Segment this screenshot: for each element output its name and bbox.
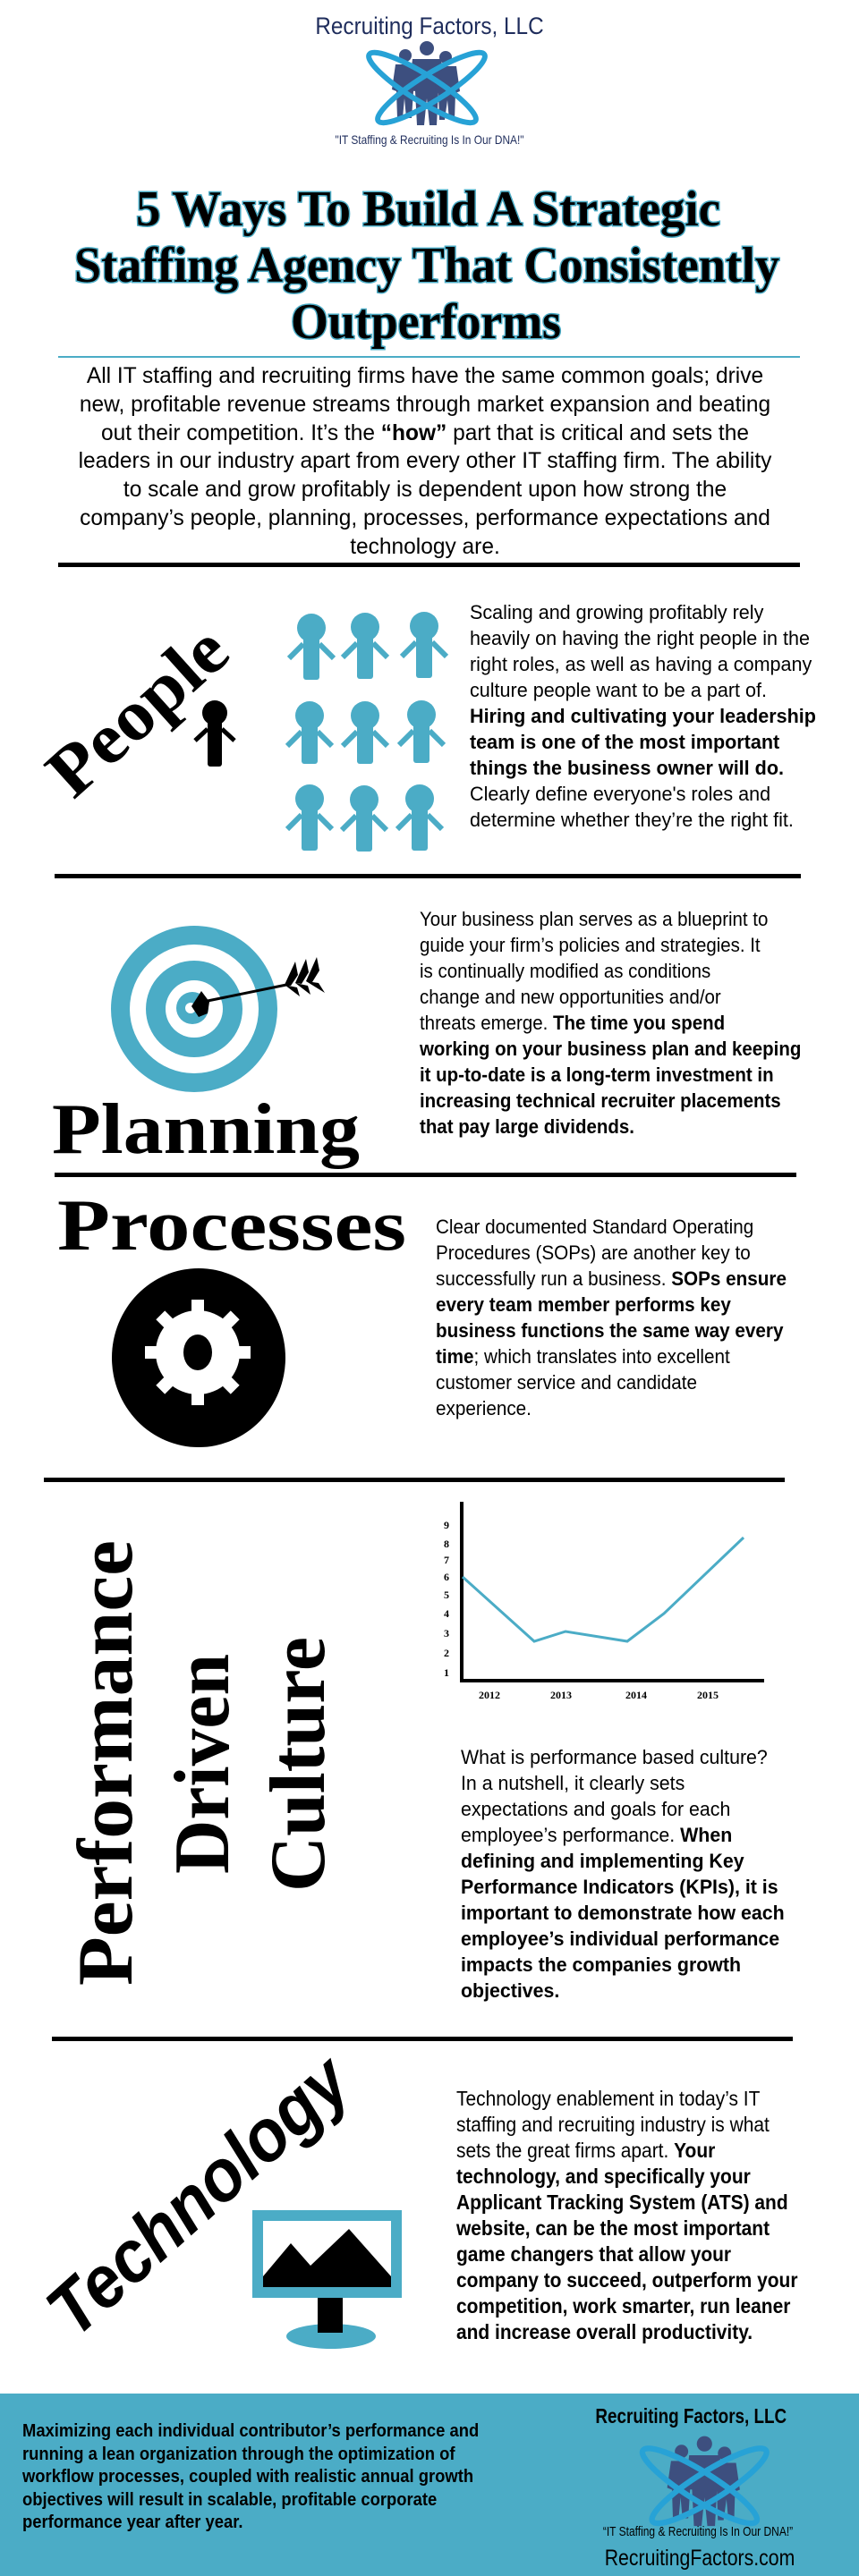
footer logo [639,2436,770,2526]
heading: Technology: Technology [31,2038,368,2351]
panel: planning [52,908,801,1169]
header tagline: "IT Staffing & Recruiting Is In Our DNA!" [335,132,524,147]
title: Staffing Agency That Consistently [74,238,779,293]
text: planning: is continually modified as conditions [420,960,710,982]
footer text: running a lean organization through the optimization of [22,2445,455,2464]
text: performance: employee’s performance. When [461,1824,732,1846]
text: technology [456,2087,798,2343]
line chart: 8 [444,1538,449,1550]
text: people: Clearly define everyone's roles and [470,783,770,805]
heading: Performance Driven Culture: Culture [255,1637,342,1892]
text: processes [436,1216,787,1419]
heading: Performance Driven Culture [63,1540,342,1986]
text: technology: and increase overall productivity. [456,2320,753,2343]
text: performance: impacts the companies growth [461,1953,741,1976]
text: people: Scaling and growing profitably rely [470,601,763,623]
footer tagline: “IT Staffing & Recruiting Is In Our DNA!” [603,2524,793,2539]
text: technology: game changers that allow your [456,2242,731,2266]
panel: processes [57,1184,787,1447]
footer text: Maximizing each individual contributor’s performance and [22,2421,479,2441]
text: performance [461,1746,785,2002]
text: people: things the business owner will do. [470,757,784,779]
text: technology: staffing and recruiting industry is what [456,2113,770,2136]
text: performance: Performance Indicators (KPIs), it is [461,1876,778,1898]
icon: leader figure [193,700,236,767]
footer text: objectives will result in scalable, profitable corporate [22,2490,437,2510]
text: planning: that pay large dividends. [420,1115,634,1138]
line chart: 2014 [625,1689,647,1701]
text: processes: experience. [436,1397,532,1419]
line chart: 4 [444,1607,449,1620]
text: processes: Clear documented Standard Operating [436,1216,753,1238]
line chart: 2012 [479,1689,500,1701]
text: technology: sets the great firms apart. Your [456,2139,715,2162]
heading: People: People [31,610,243,812]
text: processes: time; which translates into excellent [436,1345,730,1368]
text: people: heavily on having the right people in the [470,627,810,649]
text: people: culture people want to be a part of. [470,679,767,701]
text: technology: website, can be the most important [456,2216,770,2240]
text: people: team is one of the most important [470,731,779,753]
text: performance: In a nutshell, it clearly sets [461,1772,685,1794]
text: performance: defining and implementing Key [461,1850,744,1872]
text: performance: objectives. [461,1979,559,2002]
text: technology: Technology enablement in today’s IT [456,2087,760,2110]
text: technology: company to succeed, outperform your [456,2268,797,2292]
panel: performance driven culture [63,1502,785,2002]
intro paragraph: technology are. [350,534,500,559]
line chart: 5 [444,1589,449,1601]
text: planning: change and new opportunities and/or [420,986,721,1008]
text: performance: expectations and goals for each [461,1798,730,1820]
intro paragraph: out their competition. It’s the “how” part that is critical and sets the [101,420,749,445]
title: 5 Ways To Build A Strategic [136,182,720,237]
text: planning [420,908,801,1138]
line chart: 2 [444,1647,449,1659]
footer company name: Recruiting Factors, LLC [595,2404,787,2428]
heading: Performance Driven Culture: Performance [63,1540,149,1986]
line chart: 6 [444,1571,449,1583]
text: processes: every team member performs key [436,1293,731,1316]
line chart: 1 [444,1666,449,1679]
intro paragraph: company’s people, planning, processes, performance expectations and [80,505,770,530]
title [74,182,780,351]
icon: monitor [252,2210,402,2349]
text: people [470,601,816,831]
text: people: determine whether they’re the right fit. [470,809,794,831]
text: performance: What is performance based culture? [461,1746,768,1768]
line chart: 9 [444,1519,449,1531]
text: technology: technology, and specifically your [456,2165,751,2188]
text: processes: Procedures (SOPs) are another key to [436,1241,751,1264]
text: performance: employee’s individual performance [461,1928,779,1950]
icon: target with arrow [111,926,325,1092]
line chart: 3 [444,1627,449,1640]
line chart: 2013 [550,1689,572,1701]
text: processes: successfully run a business. SOPs ensure [436,1267,787,1290]
text: people: right roles, as well as having a company [470,653,812,675]
footer text [22,2421,479,2532]
intro paragraph: All IT staffing and recruiting firms have the same common goals; drive [87,363,763,388]
intro paragraph: new, profitable revenue streams through market expansion and beating [80,392,770,417]
footer [0,2394,859,2576]
intro paragraph [79,363,771,559]
heading: Performance Driven Culture: Driven [159,1654,246,1874]
text: performance: important to demonstrate how each [461,1902,785,1924]
line chart: 7 [444,1554,449,1566]
icon: people grid [285,612,448,852]
intro paragraph: leaders in our industry apart from every other IT staffing firm. The ability [79,448,771,473]
text: technology: competition, work smarter, run leaner [456,2294,790,2318]
title: Outperforms [291,294,561,350]
header: company name: Recruiting Factors, LLC [315,13,544,39]
footer text: workflow processes, coupled with realistic annual growth [22,2467,473,2487]
heading: Processes: Processes [57,1184,406,1266]
text: processes: customer service and candidate [436,1371,697,1394]
intro paragraph: to scale and grow profitably is dependent upon how strong the [123,477,727,502]
text: planning: working on your business plan and keeping [420,1038,801,1060]
header logo [366,41,488,125]
text: technology: Applicant Tracking System (ATS) and [456,2190,788,2214]
icon: gear [112,1268,285,1447]
line chart [444,1502,764,1701]
text: planning: it up-to-date is a long-term investment in [420,1063,774,1086]
text: planning: threats emerge. The time you spend [420,1012,725,1034]
footer website: RecruitingFactors.com [605,2546,795,2571]
panel: technology [31,2038,798,2351]
panel: people [31,601,816,852]
text: planning: increasing technical recruiter placements [420,1089,781,1112]
heading: Planning: Planning [52,1090,360,1169]
text: planning: guide your firm’s policies and strategies. It [420,934,761,956]
text: processes: business functions the same way every [436,1319,783,1342]
text: people: Hiring and cultivating your leadership [470,705,816,727]
text: planning: Your business plan serves as a blueprint to [420,908,768,930]
footer text: performance year after year. [22,2512,243,2532]
line chart: 2015 [697,1689,719,1701]
